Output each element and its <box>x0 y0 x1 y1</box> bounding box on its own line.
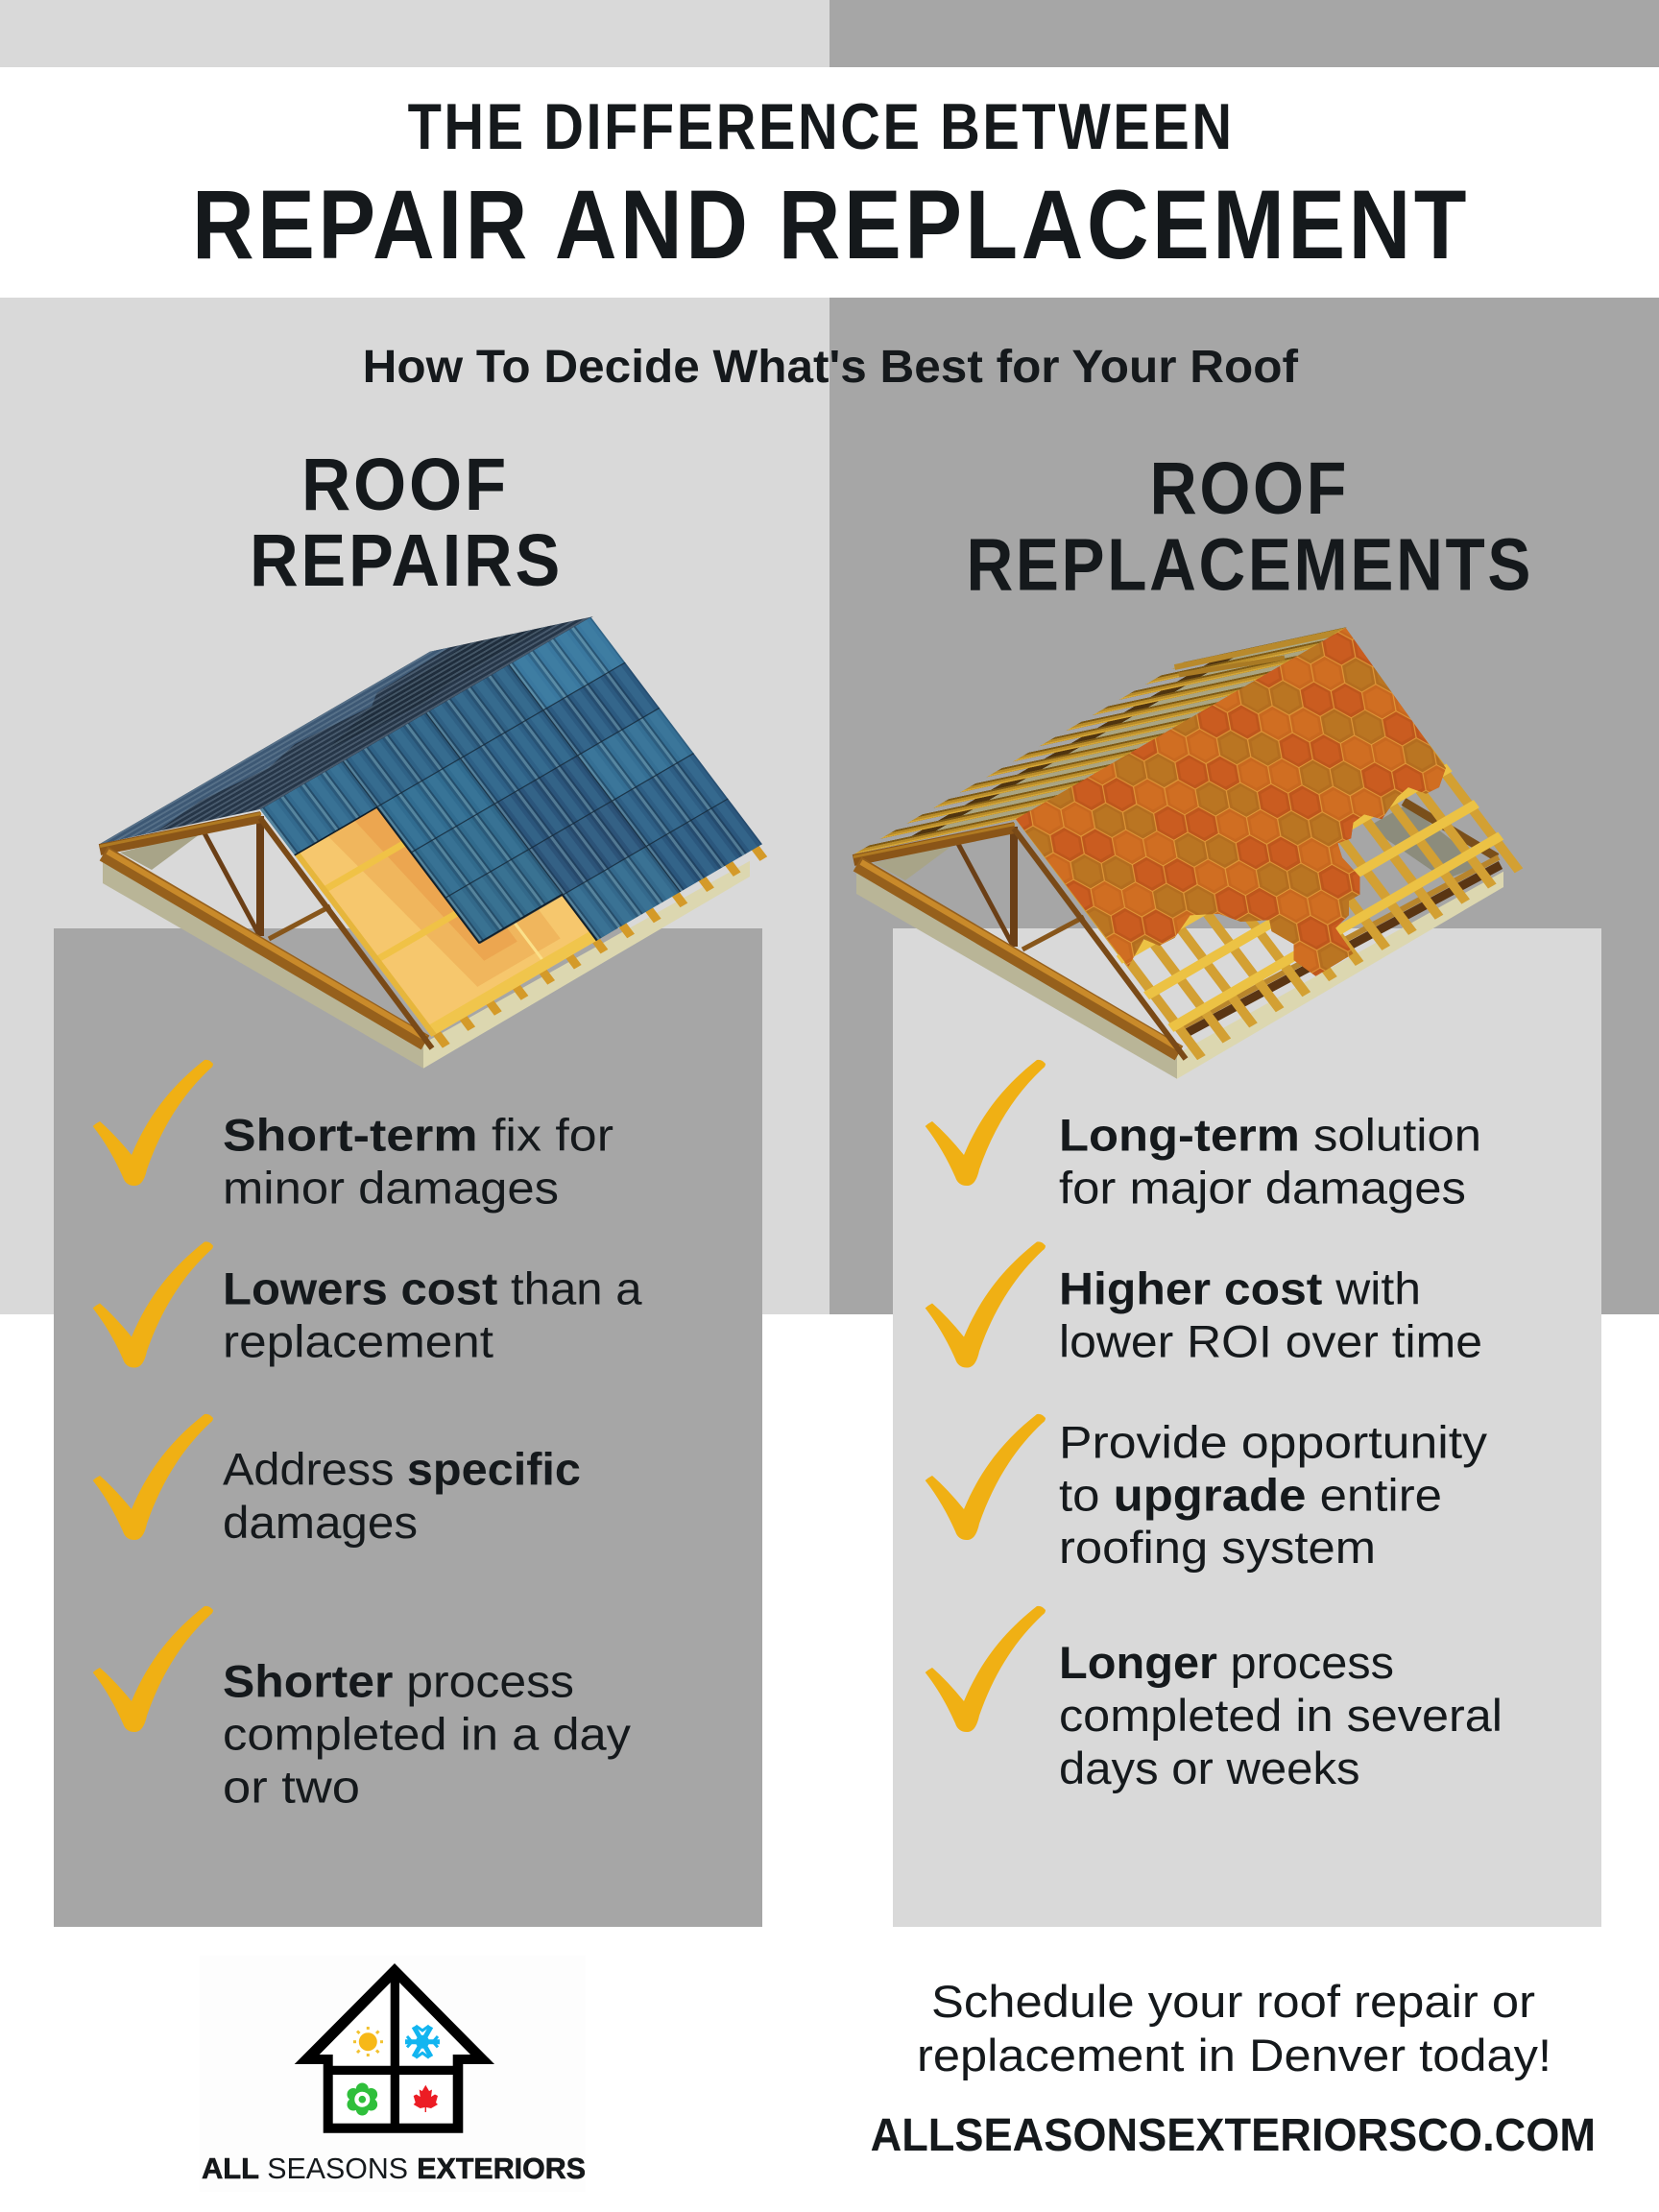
rafters and battens <box>1014 628 1526 1061</box>
icons: checkmarks <box>926 1060 1046 1732</box>
heading: roof repairs <box>250 444 563 602</box>
item: higher cost: lower ROI over time <box>1059 1315 1482 1367</box>
orange hexagon shingles <box>1016 628 1446 976</box>
heading: roof replacements: REPLACEMENTS <box>966 524 1533 607</box>
icon: house <box>295 1963 494 2133</box>
item: short-term: Short-term fix for <box>223 1110 613 1160</box>
item: higher cost: Higher cost with <box>1059 1263 1421 1313</box>
heading: roof repairs: ROOF <box>301 444 509 526</box>
item: longer process: completed in several <box>1059 1690 1503 1741</box>
call to action: replacement in Denver today! <box>917 2030 1551 2080</box>
item: long-term: for major damages <box>1059 1162 1466 1214</box>
icon: snowflake <box>405 2026 440 2057</box>
heading: roof replacements <box>966 447 1533 607</box>
checklist: roof repairs <box>93 1060 642 1813</box>
item: short-term: minor damages <box>223 1162 559 1214</box>
logo wordmark <box>202 2152 586 2185</box>
item: specific damages: Address specific <box>223 1444 581 1494</box>
heading: roof replacements: ROOF <box>1150 447 1349 530</box>
item: shorter process: or two <box>223 1761 360 1813</box>
subtitle: How To Decide What's Best for Your Roof <box>363 342 1299 393</box>
item: long-term: Long-term solution <box>1059 1110 1481 1160</box>
checklist: roof replacements <box>926 1060 1503 1793</box>
item: shorter process: completed in a day <box>223 1709 632 1759</box>
icon: maple leaf <box>414 2085 438 2112</box>
logo: All Seasons Exteriors <box>200 1956 586 2192</box>
illustration: roof with orange hexagon shingles and exposed battens <box>854 602 1548 1079</box>
back roof slope <box>100 616 593 844</box>
logo wordmark: EXTERIORS <box>417 2152 586 2185</box>
item: longer process <box>1059 1637 1503 1793</box>
title: REPAIR AND REPLACEMENT <box>192 170 1470 279</box>
back truss chord <box>1368 802 1497 879</box>
title: THE DIFFERENCE BETWEEN <box>408 90 1235 163</box>
eave band <box>1180 857 1501 1035</box>
heading: roof repairs: REPAIRS <box>250 519 563 602</box>
item: higher cost <box>1059 1263 1482 1367</box>
logo wordmark: ALL <box>202 2152 259 2185</box>
item: lower cost: replacement <box>223 1315 493 1367</box>
ridge beams <box>1175 632 1342 675</box>
item: upgrade <box>1059 1417 1488 1573</box>
item: longer process: Longer process <box>1059 1637 1394 1688</box>
exposed wood decking <box>295 758 596 1037</box>
item: lower cost <box>223 1263 642 1367</box>
icons: checkmarks <box>93 1060 213 1732</box>
website: ALLSEASONSEXTERIORSCO.COM <box>871 2110 1596 2161</box>
title <box>192 90 1470 279</box>
item: upgrade: roofing system <box>1059 1522 1376 1573</box>
two-tone background <box>0 298 1659 1314</box>
panel: replacements card <box>893 928 1601 1927</box>
call to action: Schedule your roof repair or <box>931 1976 1535 2027</box>
call to action <box>871 1976 1596 2161</box>
panel: repairs card <box>54 928 762 1927</box>
item: specific damages: damages <box>223 1497 418 1548</box>
icon: sun <box>353 2027 383 2056</box>
item: longer process: days or weeks <box>1059 1743 1359 1793</box>
front roof plane <box>260 617 772 1049</box>
item: upgrade: Provide opportunity <box>1059 1417 1488 1467</box>
illustration: roof with blue shingles and exposed decking <box>100 616 772 1069</box>
item: shorter process <box>223 1655 632 1813</box>
item: specific damages <box>223 1444 581 1548</box>
blue shingles <box>260 617 762 1037</box>
item: upgrade: to upgrade entire <box>1059 1469 1442 1521</box>
item: short-term <box>223 1110 613 1214</box>
item: shorter process: Shorter process <box>223 1655 574 1707</box>
icon: flower <box>348 2083 377 2116</box>
item: long-term <box>1059 1110 1481 1214</box>
rafter tails <box>430 841 768 1048</box>
item: lower cost: Lowers cost than a <box>223 1263 642 1313</box>
exposed back battens <box>854 627 1347 854</box>
top colour band <box>0 0 1659 67</box>
logo wordmark: SEASONS <box>267 2152 408 2185</box>
